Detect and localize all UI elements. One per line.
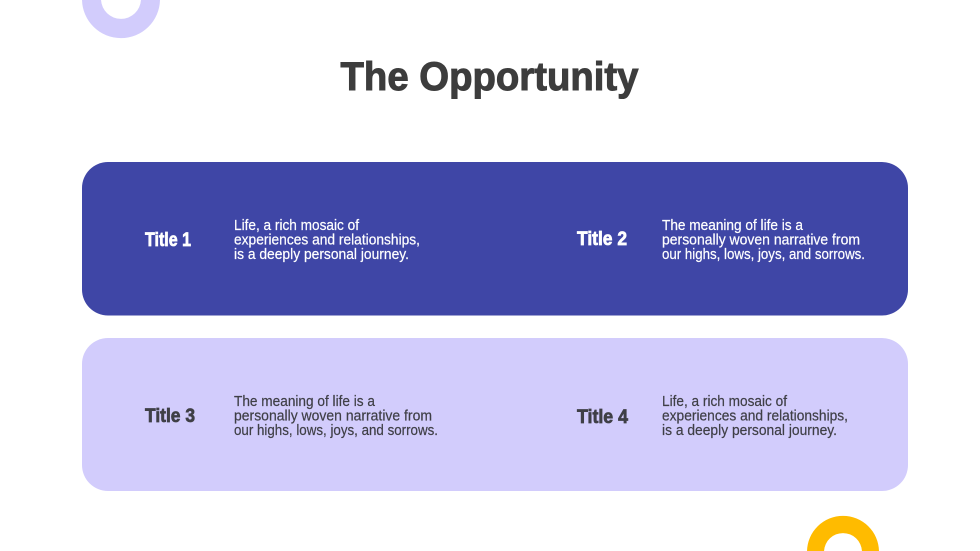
text block: Title 1 description: is a deeply personal journey. xyxy=(234,247,409,263)
text block: Title 3 description: personally woven narrative from xyxy=(234,408,432,424)
text block: Title 4 description xyxy=(662,394,848,439)
text block: Title 3 description: The meaning of life is a xyxy=(234,394,376,410)
heading: Title 1: Title 1 xyxy=(145,230,191,251)
text block: Title 3 description xyxy=(234,394,438,439)
text block: Title 1 description: Life, a rich mosaic of xyxy=(234,218,360,234)
text block: Title 2 description: The meaning of life is a xyxy=(662,218,804,234)
panel: bottom lavender xyxy=(82,338,908,491)
text block: Title 1 description xyxy=(234,218,420,263)
title: The Opportunity xyxy=(340,55,639,99)
heading: Title 4: Title 4 xyxy=(577,407,628,428)
icon: yellow ring bottom-right xyxy=(807,516,879,551)
heading: Title 2: Title 2 xyxy=(577,229,627,250)
text block: Title 2 description xyxy=(662,218,865,263)
text block: Title 4 description: experiences and relationships, xyxy=(662,408,848,424)
text block: Title 2 description: personally woven narrative from xyxy=(662,232,860,248)
text block: Title 2 description: our highs, lows, joys, and sorrows. xyxy=(662,247,865,263)
text block: Title 3 description: our highs, lows, joys, and sorrows. xyxy=(234,423,438,439)
heading: Title 3: Title 3 xyxy=(145,406,195,427)
panel: top blue xyxy=(82,162,908,316)
text block: Title 4 description: Life, a rich mosaic of xyxy=(662,394,788,410)
text block: Title 1 description: experiences and relationships, xyxy=(234,232,420,248)
icon: lavender ring top-left xyxy=(82,0,160,38)
text block: Title 4 description: is a deeply personal journey. xyxy=(662,423,837,439)
